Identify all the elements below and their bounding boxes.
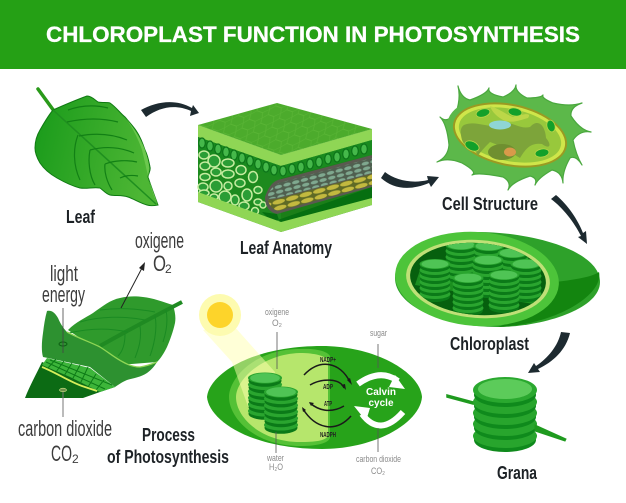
title: CHLOROPLAST FUNCTION IN PHOTOSYNTHESIS (46, 22, 580, 47)
calvin label (366, 387, 396, 409)
label: small oxigene: oxigene (265, 307, 289, 318)
grana stacks (415, 240, 542, 316)
back leaf blade (68, 296, 175, 365)
process diagram (199, 294, 422, 453)
arrow: chloroplast to grana (528, 332, 570, 373)
dark lower leaf (25, 362, 115, 398)
reaction labels: NADPH (320, 432, 336, 439)
label: small oxigene: O₂ (272, 318, 282, 329)
mesophyll strip (42, 358, 115, 392)
icon: leaf (35, 89, 158, 206)
front stack (264, 386, 298, 434)
cell membrane (447, 93, 573, 177)
stacks (248, 372, 282, 420)
label: carbon dioxide CO2: 2 (72, 452, 79, 466)
flow lines (276, 332, 378, 453)
nucleus (488, 144, 516, 160)
label: Cell Structure: Cell Structure (442, 193, 538, 214)
chloroplasts (463, 107, 556, 158)
label: light energy: light (50, 261, 78, 286)
label: oxigene O2: O (153, 251, 166, 276)
outer shell (395, 232, 600, 327)
leaf anatomy block (198, 103, 372, 232)
label: Leaf: Leaf (66, 206, 96, 227)
header banner (0, 0, 626, 69)
label: water: water (266, 453, 284, 464)
label: Process of Photosynthesis: Process (142, 424, 195, 445)
chloroplast body (207, 346, 422, 449)
grana (447, 377, 566, 452)
arrow: oxygen out (121, 262, 145, 308)
palisade cell row (199, 138, 367, 176)
reaction labels: NADP+ (320, 357, 336, 364)
spiky outer wall (437, 85, 591, 190)
label: small carbon dioxide: carbon dioxide (356, 454, 401, 465)
photosynthesis leaf (25, 296, 182, 398)
label: sugar: sugar (370, 328, 387, 339)
label: Leaf Anatomy: Leaf Anatomy (240, 237, 333, 258)
front flap (42, 311, 157, 387)
arrow: carbon in (62, 392, 64, 417)
arrow: anatomy to cell (381, 172, 439, 188)
label: oxigene O2 (135, 228, 184, 276)
reaction labels: ADP (323, 384, 333, 391)
reaction labels (320, 357, 336, 439)
top surface (198, 103, 372, 155)
label: light energy (42, 261, 85, 307)
cutaway layers (265, 155, 372, 214)
label: Chloroplast: Chloroplast (450, 333, 529, 354)
calvin cycle arrows (354, 375, 405, 426)
front ring (392, 226, 562, 332)
reaction arrows (303, 364, 351, 427)
label: carbon dioxide CO2 (18, 416, 112, 466)
arrow: cell to chloroplast (551, 195, 587, 244)
cell structure (437, 85, 591, 190)
calvin label: Calvin (366, 387, 396, 398)
label: light energy: energy (42, 282, 85, 307)
label: small carbon dioxide: CO₂ (371, 466, 385, 477)
blue vacuole (489, 120, 511, 130)
label: water: H₂O (269, 462, 283, 473)
reaction labels: ATP (324, 401, 332, 408)
label: oxigene O2: 2 (165, 262, 172, 276)
sun beam (203, 325, 285, 420)
label: oxigene O2: oxigene (135, 228, 184, 253)
stomata (59, 342, 67, 346)
chloroplast (395, 232, 600, 327)
label: carbon dioxide CO2: carbon dioxide (18, 416, 112, 441)
arrow: leaf to anatomy (141, 102, 199, 117)
calvin label: cycle (368, 398, 394, 409)
label: carbon dioxide CO2: CO (51, 441, 72, 466)
sun (199, 294, 241, 336)
label: water (266, 453, 284, 473)
spongy cells (198, 151, 266, 214)
arrow: light in (62, 308, 64, 353)
label: Process of Photosynthesis: of Photosynthesis (107, 446, 229, 467)
label: Process of Photosynthesis (107, 424, 229, 467)
label: Grana: Grana (497, 462, 538, 483)
thylakoid zones (229, 349, 330, 446)
label: small carbon dioxide (356, 454, 401, 477)
vacuole region (461, 123, 549, 158)
label: small oxigene (265, 307, 289, 329)
